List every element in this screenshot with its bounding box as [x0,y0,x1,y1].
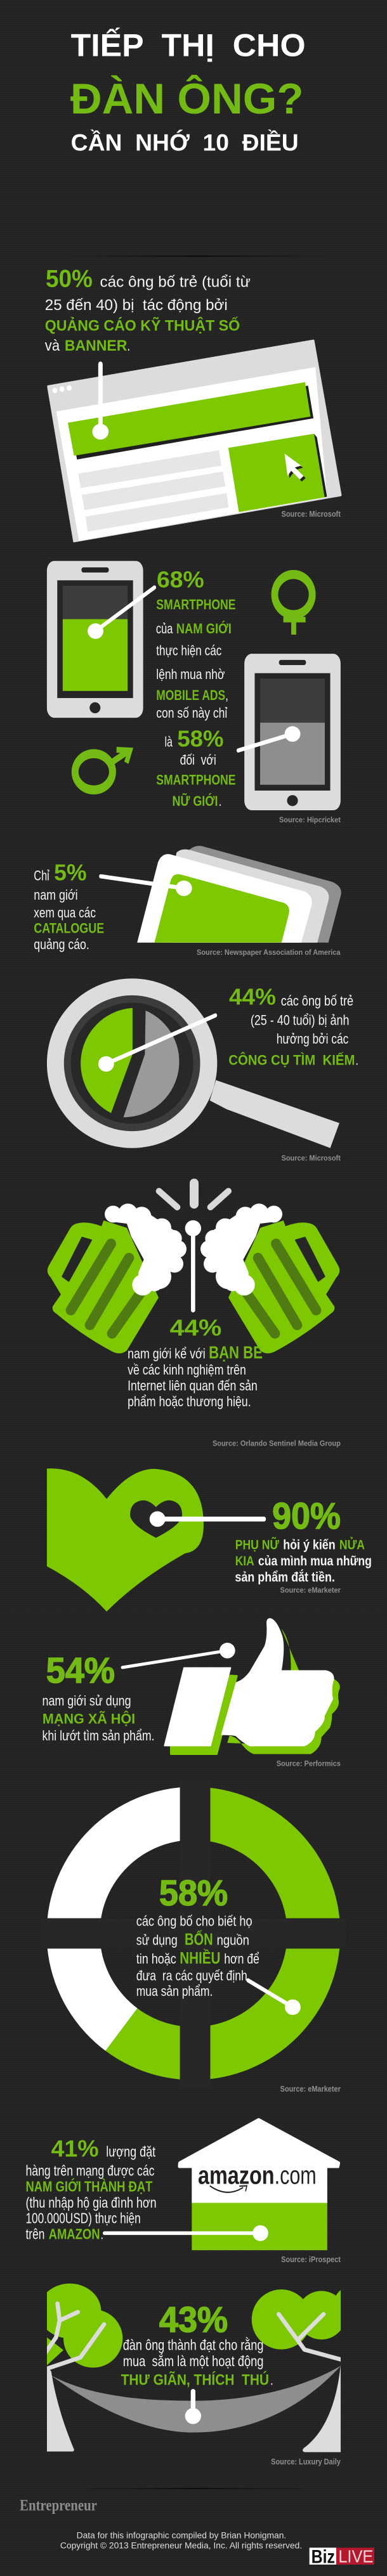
source: Source: Orlando Sentinel Media Group [213,1439,341,1448]
icon: clinking beer mugs [48,1183,339,1354]
stat text 68% and 58% [156,567,236,810]
stat text 68% and 58%: NAM GIỚI [176,620,232,637]
icon: female symbol [275,574,312,635]
stat text 50%: BANNER [65,337,127,354]
icon: male smartphone [47,561,155,718]
stat text 90% [235,1496,372,1585]
stat text 44%: hưởng bởi các [277,1032,348,1047]
icon: catalogue pages [137,846,341,943]
stat text 68% and 58%: MOBILE ADS [156,688,225,704]
stat text 68% and 58%: lệnh mua nhờ [156,667,225,683]
stat text 54%: nam giới sử dụng [43,1693,131,1709]
pin marker [150,1511,264,1527]
stat text 50%: các ông bố trẻ (tuổi từ [100,274,251,290]
panel: smartphone 68% vs 58% [47,561,341,824]
stat text 54%: MẠNG XÃ HỘI [43,1710,135,1727]
panel: digital banner ads 50% [45,266,341,541]
stat text 90%: 90% [272,1496,341,1537]
title line 2: ĐÀN ÔNG? [70,74,304,123]
source: Source: Microsoft [281,510,341,519]
icon: magnifying glass with pie [47,978,339,1148]
chart: donut [42,1780,346,2087]
stat text 41%: hàng trên mạng được các [25,2163,155,2179]
source: Source: iProspect [281,2256,341,2264]
stat text 5%: Chỉ [34,868,49,884]
pin marker [122,1643,235,1667]
stat text 44% friends: nam giới kể với [128,1346,206,1362]
icon: male symbol [75,750,130,790]
icon: left mug [48,1203,187,1354]
stat text 90%: NỬA [339,1537,365,1553]
stat text 68% and 58%: SMARTPHONE [156,597,236,613]
stat text 44% friends: 44% [170,1315,221,1341]
icon: heart [47,1468,204,1612]
source: Source: eMarketer [280,1586,341,1595]
stat text 50%: QUẢNG CÁO KỸ THUẬT SỐ [45,317,240,334]
title line 3: CẦN NHỚ 10 ĐIỀU [71,129,299,155]
stat text 50%: và [45,337,60,354]
stat text 44% friends: Internet liên quan đến sản [128,1378,258,1394]
stat text 50%: 25 đến 40) bị tác động bởi [45,297,228,314]
stat text 54%: khi lướt tìm sản phẩm. [43,1728,155,1744]
stat text 41% [25,2136,157,2243]
stat text 44%: . [355,1052,358,1068]
stat text 41%: (thu nhập hộ gia đình hơn [25,2196,157,2211]
stat text 58%: NHIỀU [180,1948,220,1967]
stat text 50% [45,266,251,354]
stat text 58%: BỐN [185,1930,213,1948]
stat text 58%: 58% [159,1873,228,1913]
stat text 44% friends [128,1315,341,1448]
title line 1: TIẾP THỊ CHO [71,29,306,63]
panel: women ask 90% [47,1468,372,1612]
stat text 90%: của mình mua những [258,1554,372,1569]
stat text 41%: AMAZON [49,2227,100,2243]
logo: amazon.com: amazon [198,2161,275,2189]
stat text 68% and 58%: . [219,794,221,810]
stat text 58%: hơn để [224,1951,259,1967]
icon: browser window [48,341,341,541]
panel: relaxing 43% [47,2284,341,2466]
stat text 68% and 58%: con số này chỉ [156,706,228,722]
stat text 44%: (25 - 40 tuổi) bị ảnh [251,1013,349,1028]
credits: Data for this infographic compiled by Brian Honigman. [77,2530,286,2540]
stat text 5%: CATALOGUE [34,921,104,936]
icon: cursor [285,454,306,481]
pin marker [185,1220,201,1311]
panel: beer friends 44% [48,1183,341,1448]
logo: amazon.com: .com [275,2161,317,2189]
stat text 41%: NAM GIỚI THÀNH ĐẠT [25,2178,153,2195]
stat text 50%: 50% [46,266,93,293]
stat text 50%: . [127,337,130,354]
icon: female smartphone [238,654,341,810]
stat text 43%: . [270,2373,273,2388]
pin marker [248,1980,301,2015]
source: Source: Newspaper Association of America [197,948,341,957]
logo: Entrepreneur: Entrepreneur [20,2496,97,2514]
stat text 5%: 5% [54,860,87,885]
stat text 44% friends: phẩm hoặc thương hiệu. [128,1394,251,1409]
stat text 68% and 58%: là [164,734,173,750]
pin marker [185,2392,201,2424]
stat text 43%: 43% [159,2299,228,2340]
panel: amazon 41% [25,2120,341,2264]
stat text 58%: nguồn [217,1932,249,1948]
logo: BizLIVE [310,2546,374,2567]
icon: clink burst [159,1183,228,1207]
panel: catalogue 5% [34,846,341,957]
pin marker [104,2225,268,2241]
stat text 5%: quảng cáo. [34,937,89,953]
stat text 41%: trên [25,2227,44,2243]
stat text 54% [43,1650,341,1768]
stat text 41%: 41% [51,2136,99,2161]
source: Source: Hipcricket [279,816,341,824]
stat text 90%: PHỤ NỮ [235,1537,279,1553]
stat text 90%: sản phẩm đắt tiền. [235,1569,335,1585]
stat text 41%: lượng đặt [106,2144,155,2160]
source: Source: Microsoft [281,1154,341,1163]
stat text 90%: hỏi ý kiến [283,1537,336,1553]
panel: four sources 58% [42,1780,346,2087]
source: Source: eMarketer [280,2085,341,2094]
source: Source: Luxury Daily [271,2458,341,2467]
stat text 58%: đưa ra các quyết định [136,1968,247,1984]
stat text 44% friends: BẠN BÈ [209,1342,263,1362]
title [70,29,306,155]
stat text 58%: mua sản phẩm. [136,1984,213,2000]
stat text 68% and 58%: của [156,621,173,637]
stat text 43%: đàn ông thành đạt cho rằng [123,2337,263,2353]
stat text 44%: các ông bố trẻ [281,994,353,1009]
logo: BizLIVE: Biz [312,2546,335,2567]
credits: Copyright © 2013 Entrepreneur Media, Inc. All rights reserved. [60,2540,302,2551]
logo: amazon.com [198,2161,317,2192]
stat text 58%: sử dụng [136,1932,178,1948]
source: Source: Performics [277,1760,341,1768]
stat text 41%: 100.000USD) thực hiện [25,2211,141,2227]
stat text 44% [228,984,358,1068]
stat text 68% and 58%: NỮ GIỚI [173,793,218,810]
stat text 68% and 58%: đối với [180,753,216,768]
stat text 68% and 58%: thực hiện các [156,644,221,659]
stat text 44% friends: về các kinh nghiệm trên [128,1362,246,1378]
icon: thumbs up [122,1618,340,1754]
stat text 90%: KIA [235,1554,254,1569]
stat text 68% and 58%: 68% [157,567,204,592]
stat text 54%: 54% [46,1650,115,1690]
stat text 44%: 44% [229,984,276,1010]
stat text 58%: tin hoặc [136,1951,176,1967]
stat text 68% and 58%: , [225,688,228,704]
icon: trees and hammock [47,2284,341,2452]
stat text 43%: THƯ GIÃN, THÍCH THÚ [121,2371,269,2388]
stat text 41%: . [100,2227,103,2243]
stat text 5%: xem qua các [34,905,96,921]
stat text 58%: các ông bố cho biết họ [136,1914,253,1929]
stat text 44%: CÔNG CỤ TÌM KIẾM [228,1051,355,1068]
stat text 58% [136,1873,259,2000]
stat text 68% and 58%: SMARTPHONE [156,773,236,788]
footer [20,2496,302,2551]
stat text 68% and 58%: 58% [177,726,223,751]
panel: search engine 44% [47,978,358,1163]
icon: right mug [200,1203,339,1354]
credits [60,2530,302,2551]
pin marker [92,361,108,439]
icon: amazon house [179,2120,339,2250]
panel: social media 54% [43,1618,341,1768]
stat text 43%: mua sắm là một hoạt động [123,2353,263,2370]
stat text 43% [121,2299,341,2467]
logo: BizLIVE: LIVE [338,2547,373,2566]
pin marker [101,876,192,896]
stat text 5% [34,860,104,953]
stat text 5%: nam giới [34,888,78,903]
